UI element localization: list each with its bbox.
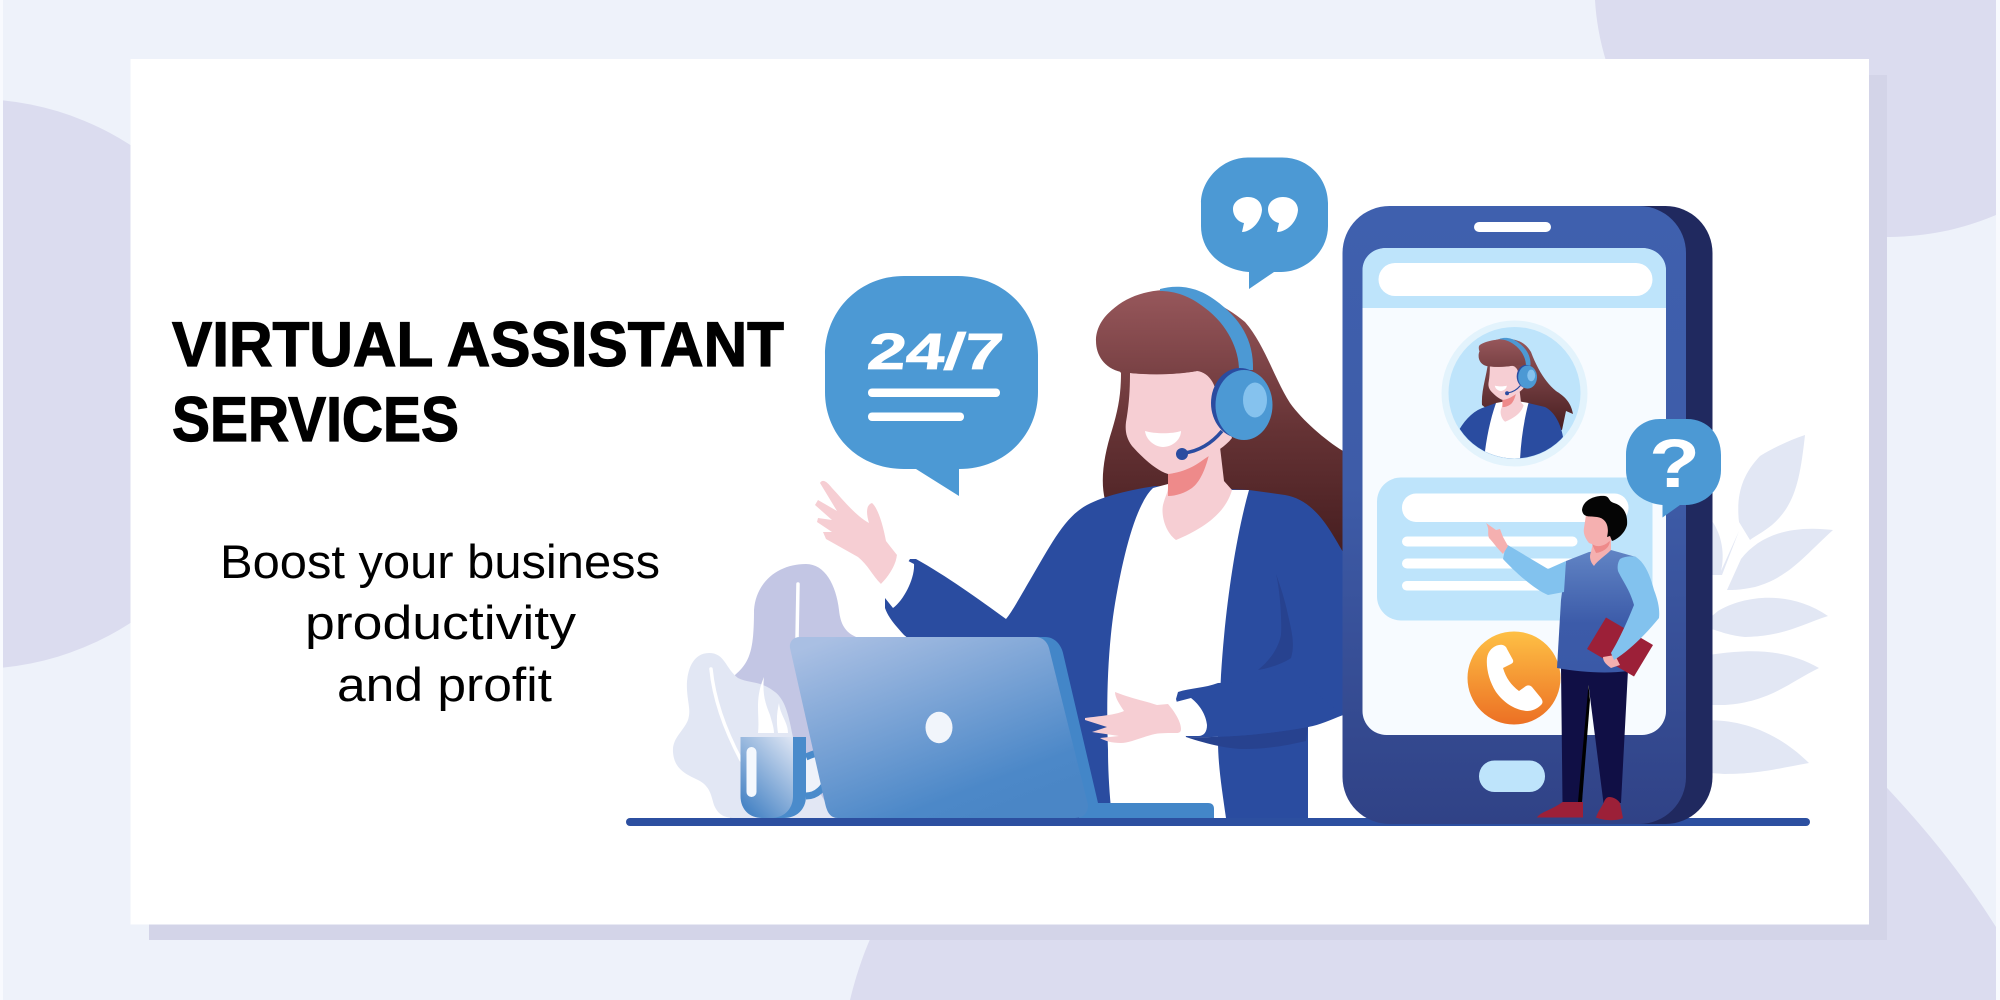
neck shadow: [1168, 455, 1209, 496]
card shadow: [149, 75, 1887, 940]
neck shadow: [1592, 540, 1610, 553]
speech bubble: question: ?: [1649, 425, 1700, 502]
avatar: [1442, 320, 1588, 470]
white card panel: [130, 59, 1869, 924]
pointing arm: [1503, 544, 1566, 595]
laptop base and back: [1035, 637, 1214, 818]
shirt: [1107, 484, 1249, 818]
holding hand: [1603, 655, 1620, 668]
jacket fold: [1258, 574, 1293, 670]
woman character: [815, 287, 1343, 818]
right cuff: [1168, 698, 1207, 736]
icon: cup highlight: [746, 747, 756, 797]
icon: laptop logo: [926, 712, 952, 743]
man character: [1486, 496, 1659, 820]
icon: headset cup inner: [1243, 382, 1267, 418]
right hand: [1085, 692, 1181, 743]
left cuff: [881, 555, 914, 608]
title: [172, 310, 784, 455]
icon: quotation marks: [1233, 197, 1298, 232]
icon: microphone: [1176, 448, 1188, 460]
icon: headset cup back: [1211, 368, 1269, 438]
pointing hand: [1486, 523, 1508, 554]
subtitle: and profit: [337, 658, 552, 711]
back hair: [1096, 290, 1343, 560]
neck and chest: [1163, 447, 1232, 540]
phone front: [1342, 206, 1686, 824]
icon: microphone boom: [1184, 431, 1222, 453]
trousers: [1561, 668, 1628, 803]
plant: pale leaf: [673, 653, 835, 818]
fringe hair: [1096, 290, 1239, 374]
phone: [1342, 206, 1712, 824]
laptop: [790, 637, 1214, 818]
speech bubble: 24/7: [825, 276, 1038, 496]
left hand: [815, 481, 897, 584]
chat message card: [1377, 478, 1652, 620]
phone speaker: [1474, 222, 1551, 232]
icon: cup front: [740, 737, 793, 818]
title: SERVICES: [172, 385, 459, 455]
icon: cup back: [765, 737, 806, 818]
phone back: [1400, 206, 1712, 824]
icon: headset cup: [1216, 370, 1272, 440]
search pill: [1378, 263, 1652, 296]
book: [1587, 618, 1653, 676]
holding arm: [1611, 556, 1659, 660]
icon: steam: [758, 677, 788, 733]
subtitle: Boost your business: [220, 535, 660, 588]
hair: [1582, 496, 1627, 541]
laptop screen: [790, 637, 1088, 818]
phone header: [1362, 248, 1666, 308]
speech bubble: question: [1626, 419, 1721, 518]
jacket: [885, 486, 1343, 818]
icon: cup handle: [806, 753, 830, 796]
icon: headset band: [1160, 287, 1253, 370]
right shoe: [1596, 797, 1623, 820]
leaves behind phone: [1690, 435, 1833, 774]
face: [1584, 515, 1612, 544]
subtitle: [220, 535, 660, 711]
plant: purple leaf: [730, 564, 880, 818]
sleeve shadow: [1186, 727, 1308, 749]
coffee cup: [740, 677, 830, 818]
home button: [1479, 760, 1545, 792]
sweater: [1557, 550, 1645, 672]
speech bubble: quote: [1201, 158, 1328, 289]
phone screen: [1362, 248, 1666, 735]
neck: [1590, 538, 1611, 566]
left shoe: [1537, 802, 1583, 818]
subtitle: productivity: [305, 596, 577, 649]
trouser shadow: [1578, 685, 1590, 802]
ground line: [626, 818, 1810, 826]
smile: [1145, 431, 1181, 447]
icon: call button: [1468, 632, 1560, 724]
face: [1126, 371, 1232, 474]
title: VIRTUAL ASSISTANT: [172, 310, 784, 380]
right sleeve: [1176, 680, 1343, 737]
speech bubble: 24/7: 24/7: [865, 323, 1006, 380]
